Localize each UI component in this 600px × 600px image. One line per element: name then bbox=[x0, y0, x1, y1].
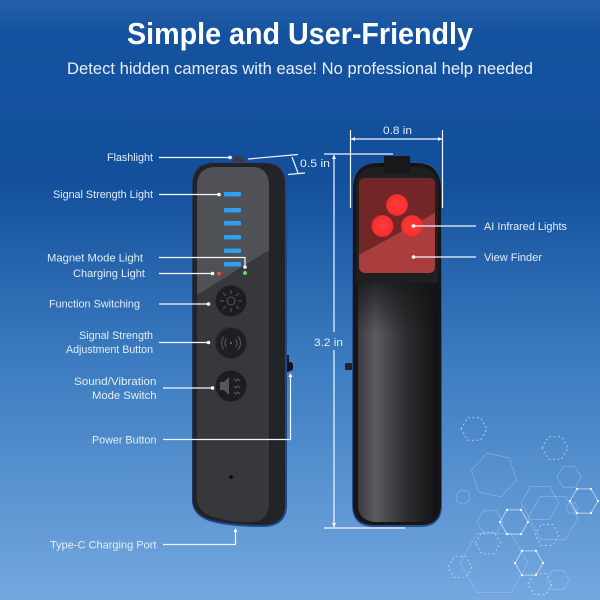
face bbox=[197, 167, 269, 522]
dimension: 0.5 in bbox=[248, 154, 330, 174]
label: View Finder bbox=[412, 252, 542, 264]
subtitle: Detect hidden cameras with ease! No professional help needed bbox=[67, 60, 533, 78]
side knob bbox=[345, 363, 352, 370]
label: Power Button bbox=[92, 373, 292, 446]
top section bbox=[356, 167, 438, 283]
device: front view bbox=[192, 156, 293, 527]
button: sound and vibration bbox=[216, 370, 246, 402]
dimension: 0.5 in: 0.5 in bbox=[300, 158, 330, 170]
body bbox=[192, 162, 287, 527]
label: Sound/Vibration Mode Switch: Mode Switch bbox=[92, 390, 156, 402]
device: back view bbox=[345, 156, 442, 527]
label: Signal Strength Adjustment Button: Signal Strength bbox=[79, 330, 153, 342]
dimension: 0.8 in: 0.8 in bbox=[383, 125, 412, 137]
label: Magnet Mode Light: Magnet Mode Light bbox=[47, 252, 143, 264]
button: function switching bbox=[216, 286, 246, 316]
label: Signal Strength Adjustment Button: Adjustment Button bbox=[66, 344, 153, 356]
power slider bbox=[284, 355, 293, 372]
red LED bbox=[217, 272, 221, 276]
flashlight bump bbox=[232, 156, 246, 162]
dimension: 3.2 in bbox=[314, 154, 405, 528]
label: Signal Strength Adjustment Button bbox=[66, 330, 210, 356]
label: Signal Strength Light: Signal Strength Light bbox=[53, 189, 153, 201]
label: Type-C Charging Port bbox=[50, 528, 238, 552]
hexagon pattern bbox=[448, 418, 598, 594]
label: Charging Light bbox=[73, 268, 214, 280]
grip shading bbox=[358, 283, 437, 333]
body bbox=[353, 163, 441, 525]
label: Function Switching bbox=[49, 298, 210, 310]
label: AI Infrared Lights: AI Infrared Lights bbox=[484, 221, 567, 233]
label: Charging Light: Charging Light bbox=[73, 268, 145, 280]
dimension: 0.8 in bbox=[350, 125, 442, 208]
view finder window bbox=[359, 178, 435, 273]
label: Sound/Vibration Mode Switch bbox=[74, 376, 214, 402]
window dark gloss bbox=[359, 178, 435, 255]
rim bbox=[352, 162, 442, 527]
glossy top bbox=[197, 167, 269, 295]
label: Sound/Vibration Mode Switch: Sound/Vibration bbox=[74, 376, 156, 388]
label: Type-C Charging Port: Type-C Charging Port bbox=[50, 540, 156, 552]
label: Magnet Mode Light bbox=[47, 252, 247, 269]
label: Function Switching: Function Switching bbox=[49, 298, 140, 310]
button: signal strength adjustment bbox=[216, 328, 246, 358]
side strip bbox=[262, 165, 285, 525]
label: Power Button: Power Button bbox=[92, 434, 156, 446]
green LED bbox=[243, 271, 247, 275]
label: AI Infrared Lights bbox=[412, 221, 567, 233]
label: View Finder: View Finder bbox=[484, 252, 542, 264]
lower grip bbox=[358, 283, 437, 522]
title: Simple and User-Friendly bbox=[127, 16, 474, 51]
dimension: 3.2 in: 3.2 in bbox=[314, 337, 343, 349]
signal strength bars bbox=[224, 192, 241, 266]
AI infrared lights bbox=[372, 194, 423, 237]
charging port hole bbox=[229, 475, 233, 479]
clip bbox=[380, 156, 414, 173]
label: Signal Strength Light bbox=[53, 189, 221, 201]
label: Flashlight bbox=[107, 152, 232, 164]
label: Flashlight: Flashlight bbox=[107, 152, 153, 164]
